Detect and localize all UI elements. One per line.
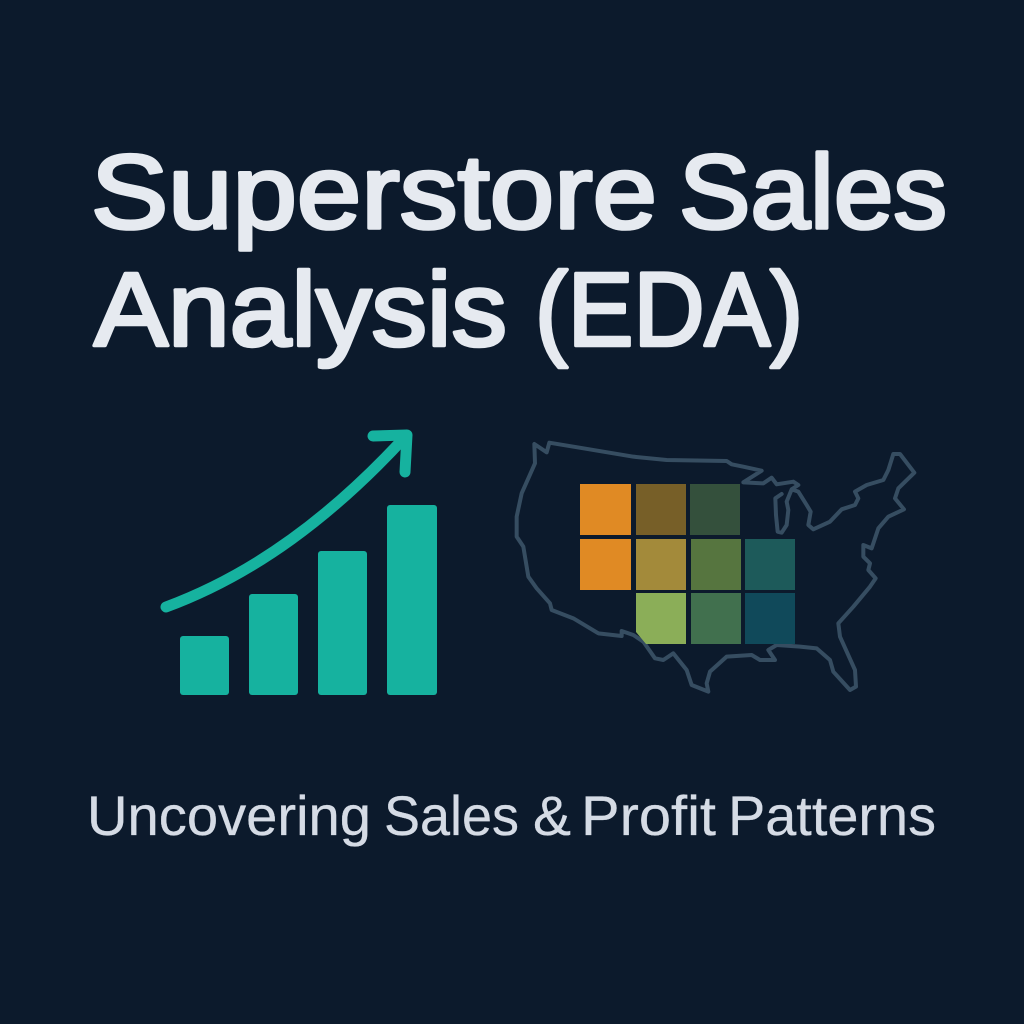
- rising arrow: [166, 435, 407, 607]
- subtitle: Patterns: [728, 784, 936, 847]
- subtitle: &: [533, 784, 571, 847]
- subtitle: [87, 784, 936, 847]
- bars: [180, 505, 437, 695]
- title: [91, 134, 947, 368]
- title: (EDA): [535, 252, 803, 368]
- title: Superstore: [91, 134, 657, 251]
- subtitle: Profit: [581, 784, 716, 847]
- subtitle: Uncovering: [87, 784, 371, 847]
- bar chart with rising arrow icon: [166, 435, 437, 695]
- subtitle: Sales: [384, 784, 519, 847]
- US map with heat grid: [517, 443, 914, 692]
- heat grid tiles: [580, 484, 795, 644]
- title: Sales: [679, 134, 947, 251]
- map outline: [517, 443, 914, 692]
- title: Analysis: [94, 252, 507, 368]
